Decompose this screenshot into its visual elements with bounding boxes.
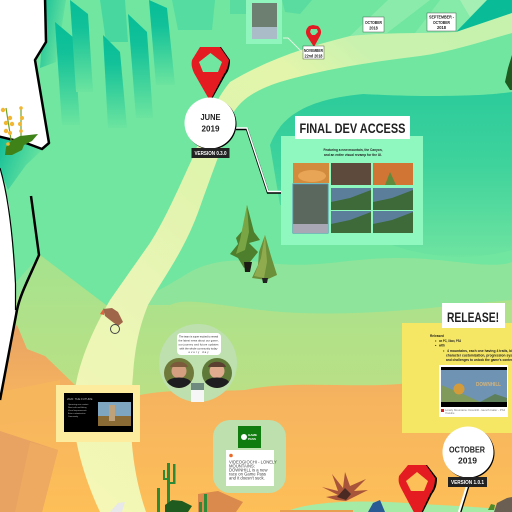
label: October 2018: OCTOBER — [365, 20, 382, 26]
panel: Final Dev Access: Featuring a new mountain, the Canyon, — [324, 147, 382, 152]
Game Pass card: and it doesn't suck. — [229, 476, 265, 480]
slide card — [56, 385, 140, 442]
light bands to the top right — [350, 0, 487, 36]
date circle: June 2019 — [184, 98, 236, 158]
orange desert — [0, 325, 512, 512]
date circle: October 2019 — [442, 426, 494, 487]
bottom-right green hill — [290, 502, 512, 512]
connector: October stem — [459, 486, 468, 512]
icon: biker lower left — [110, 502, 125, 512]
panel: Final Dev Access — [281, 116, 423, 245]
team circle: The team is super excited to reveal — [179, 334, 218, 338]
slide card: Upcoming new content — [68, 403, 89, 406]
panel: Final Dev Access: and an entire visual revamp for the UI. — [324, 152, 382, 157]
date circle: June 2019: 2019 — [202, 124, 220, 134]
team circle: every day — [188, 350, 209, 354]
panel: Release: Released — [430, 333, 444, 338]
label: October 2018: 2018 — [369, 26, 378, 32]
label: October 2018 — [363, 17, 384, 32]
team circle: the latest news about our game, — [178, 338, 219, 342]
top-right teal peak — [456, 0, 512, 32]
date circle: June 2019: JUNE — [200, 112, 221, 122]
slide card: Extra customization — [68, 412, 85, 415]
icon: pine trees — [230, 205, 277, 283]
date circle: October 2019: VERSION 1.0.1 — [451, 480, 484, 486]
label: September-October 2018: 2018 — [437, 25, 446, 31]
portrait right — [202, 358, 232, 388]
icon: cactus small — [199, 494, 207, 512]
slide card: Community — [68, 415, 78, 418]
Game Pass card: race on Game Pass — [229, 472, 266, 476]
slide card: Visual improvements — [68, 409, 87, 412]
label: September-October 2018 — [427, 13, 456, 31]
connector: June to Final Dev Access — [236, 128, 282, 192]
game screenshot card — [439, 365, 508, 417]
game screenshot card: DOWNHILL — [476, 382, 501, 388]
top screenshot card — [246, 0, 303, 53]
portrait left — [164, 358, 194, 388]
Game Pass card: VIDEOGIOCHI - LONELY — [229, 460, 277, 464]
orange sign at bottom — [280, 510, 353, 512]
panel: Final Dev Access: FINAL DEV ACCESS — [300, 120, 406, 136]
panel: Release: with — [438, 342, 445, 348]
icon: yellow flowers — [1, 106, 38, 155]
slide card: New trails and biking — [68, 406, 86, 409]
team circle — [159, 324, 237, 402]
mountain spikes — [55, 0, 175, 128]
date circle: June 2019: VERSION 0.3.0 — [194, 151, 226, 157]
icon: desert rock — [198, 491, 243, 512]
team circle: with the whole community today — [180, 346, 218, 350]
Game Pass card: GAME — [248, 433, 257, 437]
icon: biker on road — [100, 308, 123, 334]
icon: boulder bottom right — [488, 497, 512, 512]
marker: November 22nd 2018: 22nd 2018 — [304, 54, 323, 60]
panel: Release — [402, 303, 512, 433]
marker: October — [399, 465, 437, 512]
left white cliff edge — [0, 0, 49, 400]
label: September-October 2018: OCTOBER — [433, 20, 450, 26]
marker: June — [192, 47, 230, 101]
tree at right edge — [505, 55, 512, 90]
panel: Release: • — [435, 342, 437, 348]
icon: blue-shirt biker — [368, 500, 385, 512]
marker: November 22nd 2018: NOVEMBER — [304, 48, 323, 54]
screenshot grid — [293, 163, 413, 233]
Game Pass card — [213, 420, 286, 493]
date circle: October 2019: OCTOBER — [449, 444, 485, 454]
panel: Release: on PC, Xbox, PS4 — [439, 338, 462, 343]
game screenshot card: Lonely Mountains: Downhill - launch trailer - PS4 — [445, 408, 506, 412]
Game Pass card: DOWNHILL is a new — [229, 468, 268, 472]
date circle: October 2019: 2019 — [458, 456, 477, 466]
teal hill band — [270, 92, 512, 257]
panel: Release: • — [443, 348, 445, 353]
slide card: 2020: THE FUTURE — [67, 397, 93, 401]
Game Pass card: MOUNTAINS: — [229, 464, 255, 468]
panel: Release: • — [435, 338, 437, 343]
team circle: our journey and future updates — [178, 342, 219, 346]
game screenshot card: Youtube — [445, 411, 455, 415]
icon: spiky plant — [322, 472, 368, 501]
label: September-October 2018: SEPTEMBER - — [429, 14, 454, 20]
Game Pass card: PASS — [248, 437, 256, 441]
icon: cactus — [157, 463, 192, 512]
marker: November 22nd 2018 — [303, 25, 324, 60]
yellow-green lowland — [0, 255, 512, 420]
